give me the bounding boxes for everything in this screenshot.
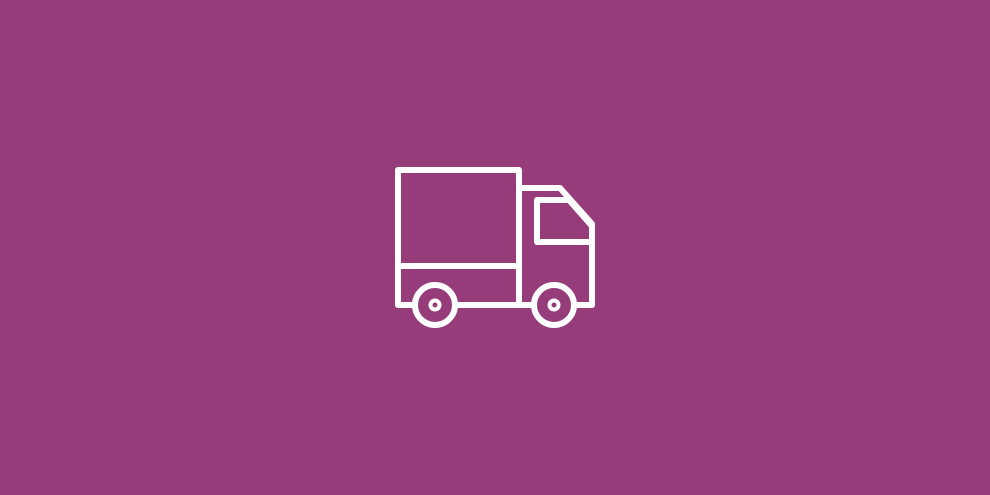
cab — [519, 188, 592, 305]
rear wheel — [415, 285, 455, 325]
cargo box — [398, 170, 519, 305]
icon: delivery truck — [398, 170, 592, 325]
front wheel — [534, 285, 574, 325]
